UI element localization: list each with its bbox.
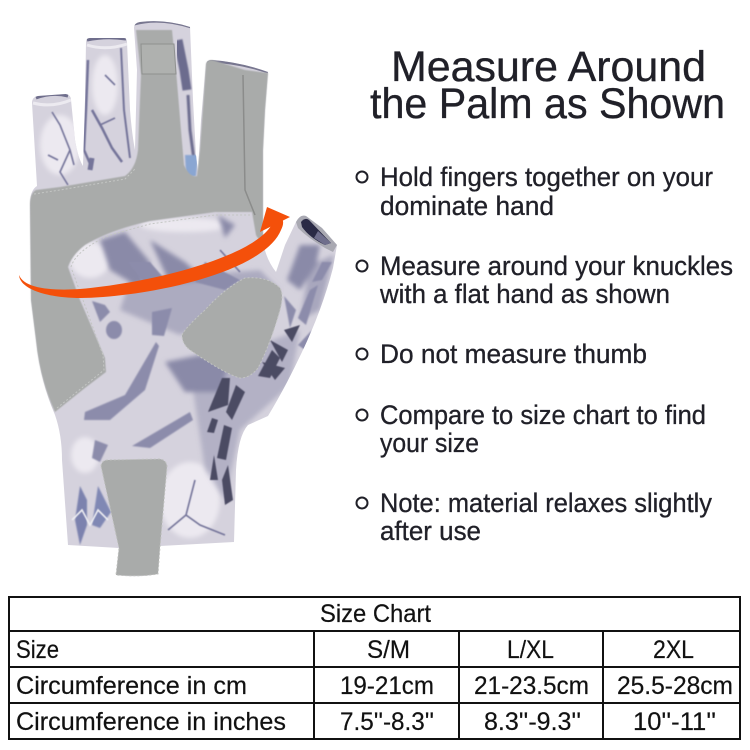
thumb pad — [182, 278, 282, 378]
wrist tab — [101, 459, 167, 576]
bullet: compare — [356, 400, 706, 458]
row: size: 2XL — [653, 636, 694, 664]
bullet: hold fingers: dominate hand — [380, 191, 554, 221]
row: circumference in cm: 19-21cm — [340, 672, 434, 700]
strip between middle and index finger — [178, 40, 194, 160]
row: circumference in cm: 21-23.5cm — [474, 672, 589, 700]
bullet: hold fingers: Hold fingers together on your — [380, 162, 713, 192]
bullet: note: Note: material relaxes slightly — [380, 488, 713, 518]
row: size: S/M — [367, 636, 410, 664]
row: circumference in inches: 8.3''-9.3'' — [484, 708, 581, 736]
bullet: compare: Compare to size chart to find — [380, 400, 706, 430]
finger cuff edges — [33, 100, 71, 105]
bullet: measure around: Measure around your knuckles — [380, 251, 733, 281]
middle finger fold — [141, 44, 176, 74]
glove camo base — [30, 21, 337, 576]
bullet: compare: your size — [380, 428, 479, 458]
bullet: measure around — [356, 251, 733, 309]
title — [370, 43, 725, 128]
orange measuring arrow — [19, 207, 290, 298]
bullet: measure around: with a flat hand as shown — [379, 279, 670, 309]
bullet: note — [356, 488, 713, 546]
row: circumference in cm — [16, 672, 733, 700]
bullet: thumb: Do not measure thumb — [380, 339, 647, 369]
row: circumference in inches: 10''-11'' — [633, 708, 716, 736]
row: size: Size — [16, 636, 59, 664]
row: circumference in cm: 25.5-28cm — [617, 672, 733, 700]
row: size — [16, 636, 694, 664]
table heading: Size Chart — [320, 600, 431, 628]
thumb opening — [296, 216, 337, 252]
row: circumference in inches: Circumference in inches — [16, 708, 286, 736]
camo marbling — [33, 21, 334, 545]
title: Measure Around — [391, 43, 706, 91]
glove photo — [30, 21, 337, 576]
row: circumference in inches: 7.5''-8.3'' — [340, 708, 434, 736]
palm panel stitching — [34, 168, 250, 408]
row: circumference in inches — [16, 708, 716, 736]
row: circumference in cm: Circumference in cm — [16, 672, 247, 700]
row: size: L/XL — [507, 636, 554, 664]
title: the Palm as Shown — [370, 80, 725, 128]
bullet: note: after use — [380, 516, 481, 546]
grey palm panel — [30, 30, 268, 412]
size chart table — [9, 597, 740, 739]
bullet: hold fingers — [356, 162, 713, 221]
